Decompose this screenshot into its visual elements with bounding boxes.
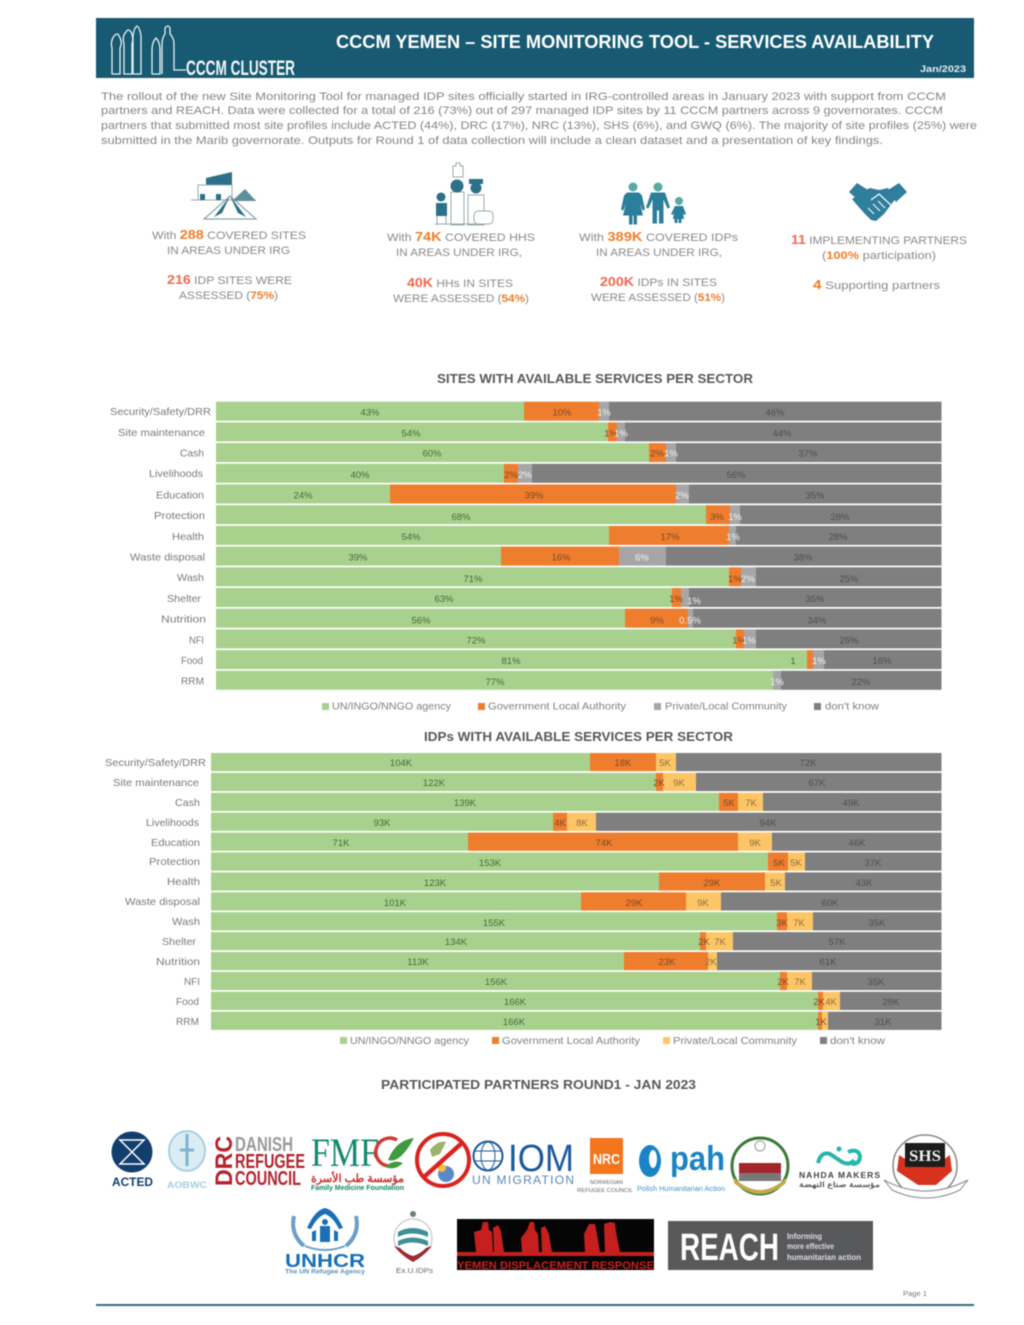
stat text: With 74K COVERED HHS — [387, 229, 535, 244]
row: Site maintenance: 122K — [423, 778, 446, 789]
row: Nutrition: 2K — [705, 957, 717, 968]
panel: partners — [791, 183, 967, 292]
row: Livelihoods: 40% — [350, 470, 370, 481]
row: Site maintenance: 54% — [401, 428, 421, 440]
row: RRM: RRM — [176, 1016, 199, 1028]
logo: FMF: FMF — [311, 1130, 379, 1175]
row: NFI: 2K — [777, 977, 789, 988]
row: Security/Safety/DRR: 5K — [659, 758, 671, 769]
legend: IDPs chart: don't know — [830, 1036, 886, 1047]
row: Nutrition: 34% — [807, 616, 827, 626]
logo: UNHCR — [285, 1208, 366, 1276]
row: Protection: 28% — [830, 512, 850, 523]
logo: DRC: DANISH — [235, 1134, 293, 1156]
row: Wash: 7K — [793, 918, 805, 929]
row: Nutrition: 61K — [820, 957, 837, 968]
row: Health: 1% — [726, 532, 740, 543]
row: Shelter: Shelter — [162, 936, 197, 948]
row: Security/Safety/DRR — [105, 753, 942, 771]
row: Nutrition: Nutrition — [161, 614, 206, 626]
row: Wash: 1% — [728, 574, 742, 585]
logo: IOM: UN MIGRATION — [472, 1173, 574, 1187]
row: Food: Food — [176, 996, 199, 1008]
logo: NRC: NRC — [593, 1151, 620, 1168]
row: Health — [167, 872, 942, 891]
row: Health: 5K — [770, 878, 782, 889]
stat text: ASSESSED ( 75%) — [179, 290, 278, 302]
row: Cash: 37% — [798, 448, 818, 460]
row: Livelihoods: 93K — [374, 818, 391, 829]
row: Livelihoods: 2% — [518, 470, 532, 481]
panel: covered IDPs — [579, 182, 739, 304]
logo: REACH: Informing — [787, 1232, 822, 1241]
logo: red prohibition circle — [417, 1134, 469, 1186]
panel: covered sites — [152, 172, 306, 302]
row: Security/Safety/DRR: 72K — [800, 758, 817, 769]
row: Health: Health — [167, 876, 200, 888]
row: Education: 39% — [524, 490, 544, 502]
logo: FMF — [311, 1130, 414, 1192]
row: Waste disposal: 29K — [626, 898, 643, 909]
legend: sites chart: Government Local Authority — [488, 702, 626, 712]
row: Site maintenance: 1% — [614, 428, 628, 440]
row: Nutrition: 56% — [411, 616, 431, 626]
row: Protection — [154, 505, 942, 524]
row: NFI: 7K — [794, 977, 806, 988]
row: Cash: 49K — [843, 798, 860, 809]
logo: NRC: NORWEGIAN — [590, 1180, 623, 1186]
stat text — [152, 227, 306, 302]
logo: Nahda Makers — [799, 1146, 880, 1189]
row: Site maintenance — [113, 773, 942, 791]
row: Waste disposal: 101K — [384, 898, 407, 909]
logo: REACH: REACH — [680, 1227, 779, 1269]
row: Waste disposal: 9K — [697, 898, 709, 909]
row: Health — [172, 526, 942, 545]
row: Security/Safety/DRR: 18K — [615, 758, 632, 769]
row: Security/Safety/DRR: 1% — [597, 408, 611, 418]
row: Education: Education — [151, 837, 200, 849]
row: Protection: 68% — [451, 512, 471, 523]
row: Wash: 35K — [869, 918, 886, 929]
panel: covered households — [387, 163, 535, 305]
logo: REACH: humanitarian action — [787, 1253, 861, 1262]
row: Health: 123K — [424, 878, 447, 889]
row: RRM — [176, 1012, 942, 1030]
row: Health: 43K — [856, 878, 873, 889]
logo: PAH — [637, 1140, 725, 1193]
logo: Nahda Makers: NAHDA MAKERS — [799, 1170, 880, 1180]
logo: SHS: SHS — [909, 1148, 941, 1165]
logo wordmark: CCCM CLUSTER — [186, 57, 295, 80]
row: RRM: 166K — [503, 1017, 526, 1028]
row: Food: 1% — [812, 656, 826, 667]
row: Education: 74K — [596, 838, 613, 849]
row: NFI: 35K — [868, 977, 885, 988]
row: Food: 4K — [825, 997, 837, 1008]
row: Protection: 1% — [728, 512, 742, 523]
row: Security/Safety/DRR: 43% — [360, 408, 380, 418]
logo: PAH: pah — [670, 1140, 725, 1178]
row: Nutrition: 9% — [650, 616, 664, 626]
logo: SHS — [884, 1135, 968, 1198]
row: Health: 54% — [401, 532, 421, 543]
row: Wash: 2% — [741, 574, 755, 585]
row: Protection: 5K — [773, 858, 785, 869]
icon: site buildings and tents — [191, 172, 256, 219]
row: Education — [156, 484, 942, 504]
row: Cash: 1% — [664, 448, 678, 460]
logo: Ex.U.IDPs — [394, 1211, 433, 1275]
row: NFI: NFI — [189, 634, 204, 646]
logo: DRC: DRC — [211, 1136, 238, 1186]
row: RRM: 31K — [875, 1017, 892, 1028]
row: Education: 9K — [749, 838, 761, 849]
intro paragraph: submitted in the Marib governorate. Outputs for Round 1 of data collection will include a clean dataset and a presentation of key findings. — [101, 135, 883, 147]
row: RRM: RRM — [181, 676, 204, 688]
row: Waste disposal — [130, 547, 942, 566]
logo: DRC — [211, 1134, 305, 1190]
row: Health: 28% — [828, 532, 848, 543]
row: Nutrition: Nutrition — [156, 956, 200, 968]
legend: sites chart: Private/Local Community — [665, 702, 787, 712]
row: Education: 24% — [293, 490, 313, 502]
row: Waste disposal: 38% — [793, 552, 813, 564]
row: Waste disposal — [125, 892, 942, 910]
row: Shelter: 1% — [687, 596, 701, 607]
row: Cash: 139K — [454, 798, 477, 809]
row: Waste disposal: 39% — [348, 552, 368, 564]
heading: sites chart: SITES WITH AVAILABLE SERVICES PER SECTOR — [437, 372, 753, 386]
row: Security/Safety/DRR: 46% — [765, 408, 785, 418]
row: NFI: 1% — [742, 636, 756, 646]
page number: Page 1 — [903, 1289, 927, 1298]
row: Security/Safety/DRR: 104K — [390, 758, 413, 769]
footer line — [96, 1304, 974, 1306]
intro paragraph: partners and REACH. Data were collected for a total of 216 (73%) out of 297 managed IDP sites by 11 CCCM partners across 9 governorates. CCCM — [101, 105, 943, 117]
row: Shelter — [162, 932, 942, 950]
row: Shelter — [167, 588, 942, 607]
logo: REACH: more effective — [787, 1242, 834, 1251]
logo: NRC: REFUGEE COUNCIL — [577, 1188, 633, 1194]
row: Waste disposal: Waste disposal — [125, 896, 200, 908]
logo: UNHCR: UNHCR — [285, 1250, 365, 1271]
row: RRM: 1% — [770, 677, 784, 688]
stat text: 200K IDPs IN SITES — [600, 274, 717, 289]
row: Protection: 37K — [865, 858, 882, 869]
row: Waste disposal: 6% — [635, 552, 649, 564]
logo: REACH — [668, 1221, 873, 1270]
row: NFI: 1% — [732, 636, 746, 646]
row: NFI: 72% — [466, 636, 486, 646]
row: RRM: 77% — [485, 677, 505, 688]
stat text: 40K HHs IN SITES — [407, 275, 513, 290]
row: Livelihoods: 8K — [576, 818, 588, 829]
row: Food: 1 — [790, 656, 796, 667]
row: Security/Safety/DRR: Security/Safety/DRR — [110, 406, 211, 418]
row: Food: 166K — [504, 997, 527, 1008]
stat text: WERE ASSESSED ( 51%) — [591, 292, 725, 304]
row: Food: 81% — [501, 656, 521, 667]
row: Waste disposal: 16% — [551, 552, 571, 564]
chart: IDPs with available services per sector — [105, 753, 942, 1030]
row: Wash: 25% — [839, 574, 859, 585]
row: Livelihoods: 94K — [760, 818, 777, 829]
row: Livelihoods: 2% — [504, 470, 518, 481]
logo: IOM — [472, 1138, 574, 1187]
row: Site maintenance — [118, 422, 942, 441]
logo: UNHCR: The UN Refugee Agency — [285, 1270, 366, 1276]
icon: CCCM people outline logo — [111, 26, 186, 74]
stat text: IN AREAS UNDER IRG — [167, 245, 290, 257]
row: NFI — [189, 629, 942, 648]
row: Site maintenance: Site maintenance — [113, 777, 199, 789]
row: Cash: 60% — [422, 448, 442, 460]
row: Protection: 153K — [479, 858, 502, 869]
stat text — [791, 232, 967, 292]
logo: FMF: Family Medicine Foundation — [311, 1185, 404, 1192]
row: Wash — [177, 567, 942, 586]
row: Shelter: 134K — [445, 937, 468, 948]
partner logos — [112, 1130, 968, 1276]
chart: sites with available services per sector — [110, 402, 942, 690]
stat text — [579, 229, 739, 304]
logo: AOBWC — [167, 1131, 207, 1191]
legend: IDPs chart: UN/INGO/NNGO agency — [350, 1036, 469, 1047]
stat text: 216 IDP SITES WERE — [167, 272, 292, 287]
legend: sites chart — [322, 702, 880, 712]
row: RRM — [181, 671, 942, 690]
row: Cash: Cash — [175, 797, 200, 809]
row: Nutrition — [161, 609, 942, 628]
logo: FMF: مؤسسة طب الأسرة — [311, 1171, 404, 1185]
row: Education — [151, 833, 942, 851]
intro paragraph: The rollout of the new Site Monitoring Tool for managed IDP sites officially started in IRG-controlled areas in January 2023 with support from CCCM — [101, 91, 946, 103]
row: Education: 71K — [333, 838, 350, 849]
row: NFI: 25% — [839, 636, 859, 646]
date: Jan/2023 — [920, 64, 966, 74]
logo: DRC: COUNCIL — [235, 1168, 301, 1190]
logo: PAH: Polish Humanitarian Action — [637, 1184, 725, 1193]
logo: ACTED: ACTED — [112, 1177, 153, 1189]
logo: IOM: IOM — [508, 1138, 574, 1180]
row: RRM: 1K — [815, 1017, 827, 1028]
row: Nutrition: 0.5% — [679, 616, 701, 626]
row: Site maintenance: 1% — [604, 428, 618, 440]
logo: AOBWC: AOBWC — [167, 1180, 207, 1191]
legend: IDPs chart: Government Local Authority — [502, 1036, 640, 1047]
stat text: IN AREAS UNDER IRG, — [596, 247, 722, 259]
stat text: With 288 COVERED SITES — [152, 227, 306, 242]
legend: IDPs chart: Private/Local Community — [673, 1036, 797, 1047]
row: NFI: NFI — [184, 976, 200, 988]
logo: Yemen Displacement Response: YEMEN DISPLACEMENT RESPONSE — [457, 1260, 654, 1272]
row: Health: 29K — [704, 878, 721, 889]
row: Site maintenance: 2K — [653, 778, 665, 789]
row: Site maintenance: 67K — [809, 778, 826, 789]
row: Security/Safety/DRR: Security/Safety/DRR — [105, 757, 206, 769]
logo: Yemen Displacement Response — [457, 1219, 654, 1272]
row: Protection: Protection — [154, 510, 205, 522]
header banner — [96, 18, 974, 80]
intro paragraph — [101, 91, 977, 147]
row: Livelihoods: Livelihoods — [149, 468, 203, 480]
row: Site maintenance: 44% — [772, 428, 792, 440]
row: Shelter: 2K — [698, 937, 710, 948]
row: Nutrition: 23K — [659, 957, 676, 968]
row: Site maintenance: 9K — [673, 778, 685, 789]
row: Cash — [175, 793, 942, 811]
row: Health: 17% — [660, 532, 680, 543]
row: Shelter: 35% — [805, 594, 825, 605]
logo: Ex.U.IDPs: Ex.U.IDPs — [396, 1266, 433, 1275]
row: Security/Safety/DRR — [110, 402, 942, 421]
row: Protection: Protection — [149, 856, 200, 868]
row: Cash — [180, 443, 942, 462]
legend: IDPs chart — [340, 1036, 886, 1047]
logo: ACTED — [112, 1132, 153, 1189]
row: Wash: Wash — [177, 572, 204, 584]
row: Wash — [172, 912, 942, 930]
row: Cash: 2% — [650, 448, 664, 460]
row: Livelihoods — [149, 464, 942, 483]
row: Cash: Cash — [180, 448, 204, 460]
row: Food — [176, 992, 942, 1010]
row: Protection: 3% — [710, 512, 724, 523]
stat text: IN AREAS UNDER IRG, — [396, 247, 522, 259]
row: Shelter: 1% — [669, 594, 683, 605]
row: Education: 46K — [849, 838, 866, 849]
legend: sites chart: UN/INGO/NNGO agency — [332, 702, 451, 712]
row: Waste disposal: 60K — [822, 898, 839, 909]
row: Protection — [149, 852, 942, 871]
stat text: (100% participation) — [822, 250, 936, 262]
row: Nutrition — [156, 952, 942, 970]
row: Shelter: 7K — [714, 937, 726, 948]
row: Livelihoods: Livelihoods — [146, 817, 199, 829]
row: Food — [181, 650, 942, 669]
row: Livelihoods — [146, 813, 942, 831]
row: Education: 35% — [805, 490, 825, 502]
intro paragraph: partners that submitted most site profiles include ACTED (44%), DRC (17%), NRC (13%), SHS (6%), and GWQ (6%). The majority of site profiles (25%) were — [101, 120, 977, 132]
row: Nutrition: 113K — [407, 957, 429, 968]
logo: NRC — [577, 1138, 633, 1194]
icon: handshake — [849, 183, 907, 221]
icon: family silhouettes — [621, 182, 686, 224]
row: Wash: 71% — [463, 574, 483, 585]
row: Food: 16% — [872, 656, 892, 667]
row: Health: Health — [172, 531, 204, 543]
row: Cash: 5K — [723, 798, 735, 809]
row: Shelter: 63% — [434, 594, 454, 605]
row: Education: Education — [156, 490, 204, 502]
stat text — [387, 229, 535, 305]
row: NFI: 156K — [485, 977, 508, 988]
logo: round emblem — [732, 1138, 788, 1194]
heading: partners: PARTICIPATED PARTNERS ROUND1 - JAN 2023 — [381, 1078, 696, 1092]
logo: DRC: REFUGEE — [235, 1151, 305, 1173]
row: Food: Food — [181, 655, 203, 667]
row: Shelter: Shelter — [167, 593, 202, 605]
row: Shelter: 57K — [829, 937, 846, 948]
stat text: With 389K COVERED IDPs — [579, 229, 739, 244]
row: Food: 28K — [883, 997, 900, 1008]
row: Cash: 7K — [745, 798, 757, 809]
stat text: 4 Supporting partners — [813, 277, 941, 292]
row: Livelihoods: 56% — [726, 470, 746, 481]
title: CCCM YEMEN – SITE MONITORING TOOL - SERVICES AVAILABILITY — [336, 32, 934, 52]
row: Livelihoods: 4K — [554, 818, 566, 829]
row: Food: 2K — [813, 997, 825, 1008]
row: Protection: 5K — [790, 858, 802, 869]
stat text: 11 IMPLEMENTING PARTNERS — [791, 232, 967, 247]
stat text: WERE ASSESSED ( 54%) — [393, 293, 529, 305]
heading: IDPs chart: IDPs WITH AVAILABLE SERVICES PER SECTOR — [424, 730, 733, 744]
row: Wash: 155K — [483, 918, 506, 929]
logo: Nahda Makers: مؤسسة صناع النهضة — [799, 1181, 880, 1189]
icon: family with luggage — [435, 163, 493, 225]
row: RRM: 22% — [851, 677, 871, 688]
row: Education: 2% — [675, 490, 689, 502]
row: Waste disposal: Waste disposal — [130, 552, 205, 564]
row: Wash: 3K — [776, 918, 788, 929]
row: Site maintenance: Site maintenance — [118, 427, 205, 439]
legend: sites chart: don't know — [825, 702, 880, 712]
row: Security/Safety/DRR: 10% — [552, 408, 572, 418]
row: Wash: Wash — [172, 916, 200, 928]
row: NFI — [184, 972, 942, 990]
